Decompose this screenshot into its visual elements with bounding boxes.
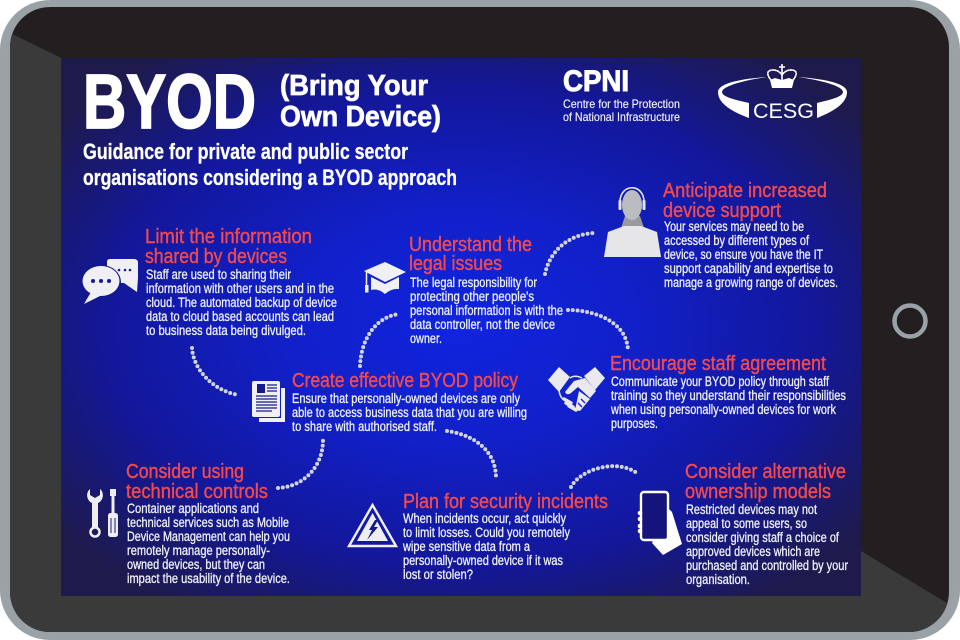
body text	[127, 501, 290, 586]
heading: shared by devices	[145, 246, 287, 268]
body text: protecting other people's	[410, 289, 534, 304]
body text: training so they understand their responsibilities	[611, 388, 846, 403]
body text: lost or stolen?	[403, 567, 473, 582]
body text: to limit losses. Could you remotely	[403, 525, 570, 540]
subtitle	[83, 139, 457, 190]
heading: Limit the information	[145, 226, 312, 248]
heading: Anticipate increased	[663, 180, 827, 202]
body text: approved devices which are	[686, 544, 820, 559]
panel: consider using technical controls	[87, 461, 290, 586]
body text	[610, 374, 846, 431]
panel: limit the information	[81, 226, 337, 338]
subtitle: Guidance for private and public sector	[83, 139, 408, 164]
icon: hand holding phone	[638, 492, 682, 555]
body text: technical services such as Mobile	[127, 515, 289, 530]
screen background	[61, 58, 861, 596]
body text: personally-owned device if it was	[403, 553, 563, 568]
panel: plan for security incidents	[349, 491, 608, 582]
heading: technical controls	[126, 481, 268, 503]
body text: support capability and expertise to	[664, 261, 833, 276]
title: BYOD	[83, 59, 256, 145]
body text: cloud. The automated backup of device	[146, 295, 337, 310]
logo: CESG	[718, 64, 847, 123]
body text: manage a growing range of devices.	[664, 275, 838, 290]
icon: warning triangle	[349, 505, 396, 546]
body text: Your services may need to be	[664, 219, 804, 234]
heading: device support	[663, 200, 781, 222]
logo: CPNI	[563, 65, 680, 124]
body text: to business data being divulged.	[146, 323, 306, 338]
icon: mortarboard	[364, 262, 406, 294]
subtitle: organisations considering a BYOD approach	[83, 165, 457, 190]
panel: create effective BYOD policy	[252, 370, 527, 434]
body text	[146, 267, 337, 338]
logo: CPNI: of National Infrastructure	[563, 110, 680, 124]
tablet home button	[894, 306, 926, 336]
body text	[402, 511, 570, 582]
heading	[663, 180, 827, 222]
body text: data controller, not the device	[410, 317, 555, 332]
icon: documents	[252, 381, 285, 422]
body text: wipe sensitive data from a	[402, 539, 530, 554]
body text: Communicate your BYOD policy through staff	[611, 374, 829, 389]
heading	[409, 234, 532, 275]
panel: understand the legal issues	[364, 234, 563, 346]
body text: Restricted devices may not	[686, 502, 817, 517]
icon: wrench and screwdriver	[87, 489, 118, 537]
body text: accessed by different types of	[664, 233, 809, 248]
body text: organisation.	[686, 572, 750, 587]
body text: to share with authorised staff.	[292, 419, 437, 434]
icon: speech bubbles	[81, 259, 138, 304]
logo: CPNI: CPNI	[563, 65, 629, 98]
body text: when using personally-owned devices for work	[610, 402, 836, 417]
heading: Consider using	[126, 461, 244, 483]
body text: purchased and controlled by your	[686, 558, 848, 573]
body text: The legal responsibility for	[410, 275, 537, 290]
arrow: dotted legal to support	[545, 233, 597, 274]
heading: Consider alternative	[685, 461, 846, 483]
body text: information with other users and in the	[146, 281, 334, 296]
arrow: dotted legal to agreement	[568, 310, 628, 352]
panel: consider alternative ownership models	[638, 461, 848, 587]
body text: impact the usability of the device.	[127, 571, 290, 586]
title: Own Device)	[280, 101, 441, 133]
body text	[664, 219, 838, 290]
heading	[126, 461, 268, 503]
body text: owned devices, but they can	[127, 557, 265, 572]
body text: consider giving staff a choice of	[686, 530, 839, 545]
heading	[145, 226, 312, 268]
body text: device, so ensure you have the IT	[664, 247, 823, 262]
title	[83, 59, 441, 145]
heading: Understand the	[409, 234, 532, 256]
title: (Bring Your	[280, 70, 428, 102]
body text: owner.	[410, 331, 442, 346]
body text: Staff are used to sharing their	[146, 267, 291, 282]
body text: When incidents occur, act quickly	[403, 511, 566, 526]
arrow: dotted incidents to ownership	[571, 466, 637, 487]
body text: Device Management can help you	[127, 529, 290, 544]
body text	[686, 502, 848, 587]
panel: encourage staff agreement	[548, 353, 846, 431]
body text: purposes.	[611, 416, 658, 431]
logo: CPNI: Centre for the Protection	[563, 97, 680, 111]
body text: able to access business data that you are willing	[292, 405, 527, 420]
body text: Container applications and	[127, 501, 259, 516]
body text: data to cloud based accounts can lead	[146, 309, 334, 324]
heading: legal issues	[409, 253, 502, 275]
heading: Plan for security incidents	[403, 491, 608, 513]
heading: ownership models	[685, 481, 831, 503]
heading: Encourage staff agreement	[610, 353, 826, 375]
body text	[410, 275, 563, 346]
heading	[685, 461, 846, 503]
body text: remotely manage personally-	[127, 543, 270, 558]
heading: Create effective BYOD policy	[292, 370, 518, 392]
body text: personal information is with the	[410, 303, 563, 318]
panel: anticipate increased device support	[604, 180, 838, 290]
body text: Ensure that personally-owned devices are only	[292, 391, 520, 406]
arrow: dotted controls to policy	[278, 440, 323, 488]
icon: handshake	[548, 367, 605, 411]
logo: CESG: CESG	[753, 99, 814, 123]
arrow: dotted limit to policy	[192, 348, 239, 395]
icon: headset person	[604, 188, 661, 257]
body text: appeal to some users, so	[686, 516, 807, 531]
arrow: dotted policy to legal	[360, 314, 399, 366]
body text	[292, 391, 527, 434]
arrow: dotted policy to incidents	[447, 431, 496, 478]
